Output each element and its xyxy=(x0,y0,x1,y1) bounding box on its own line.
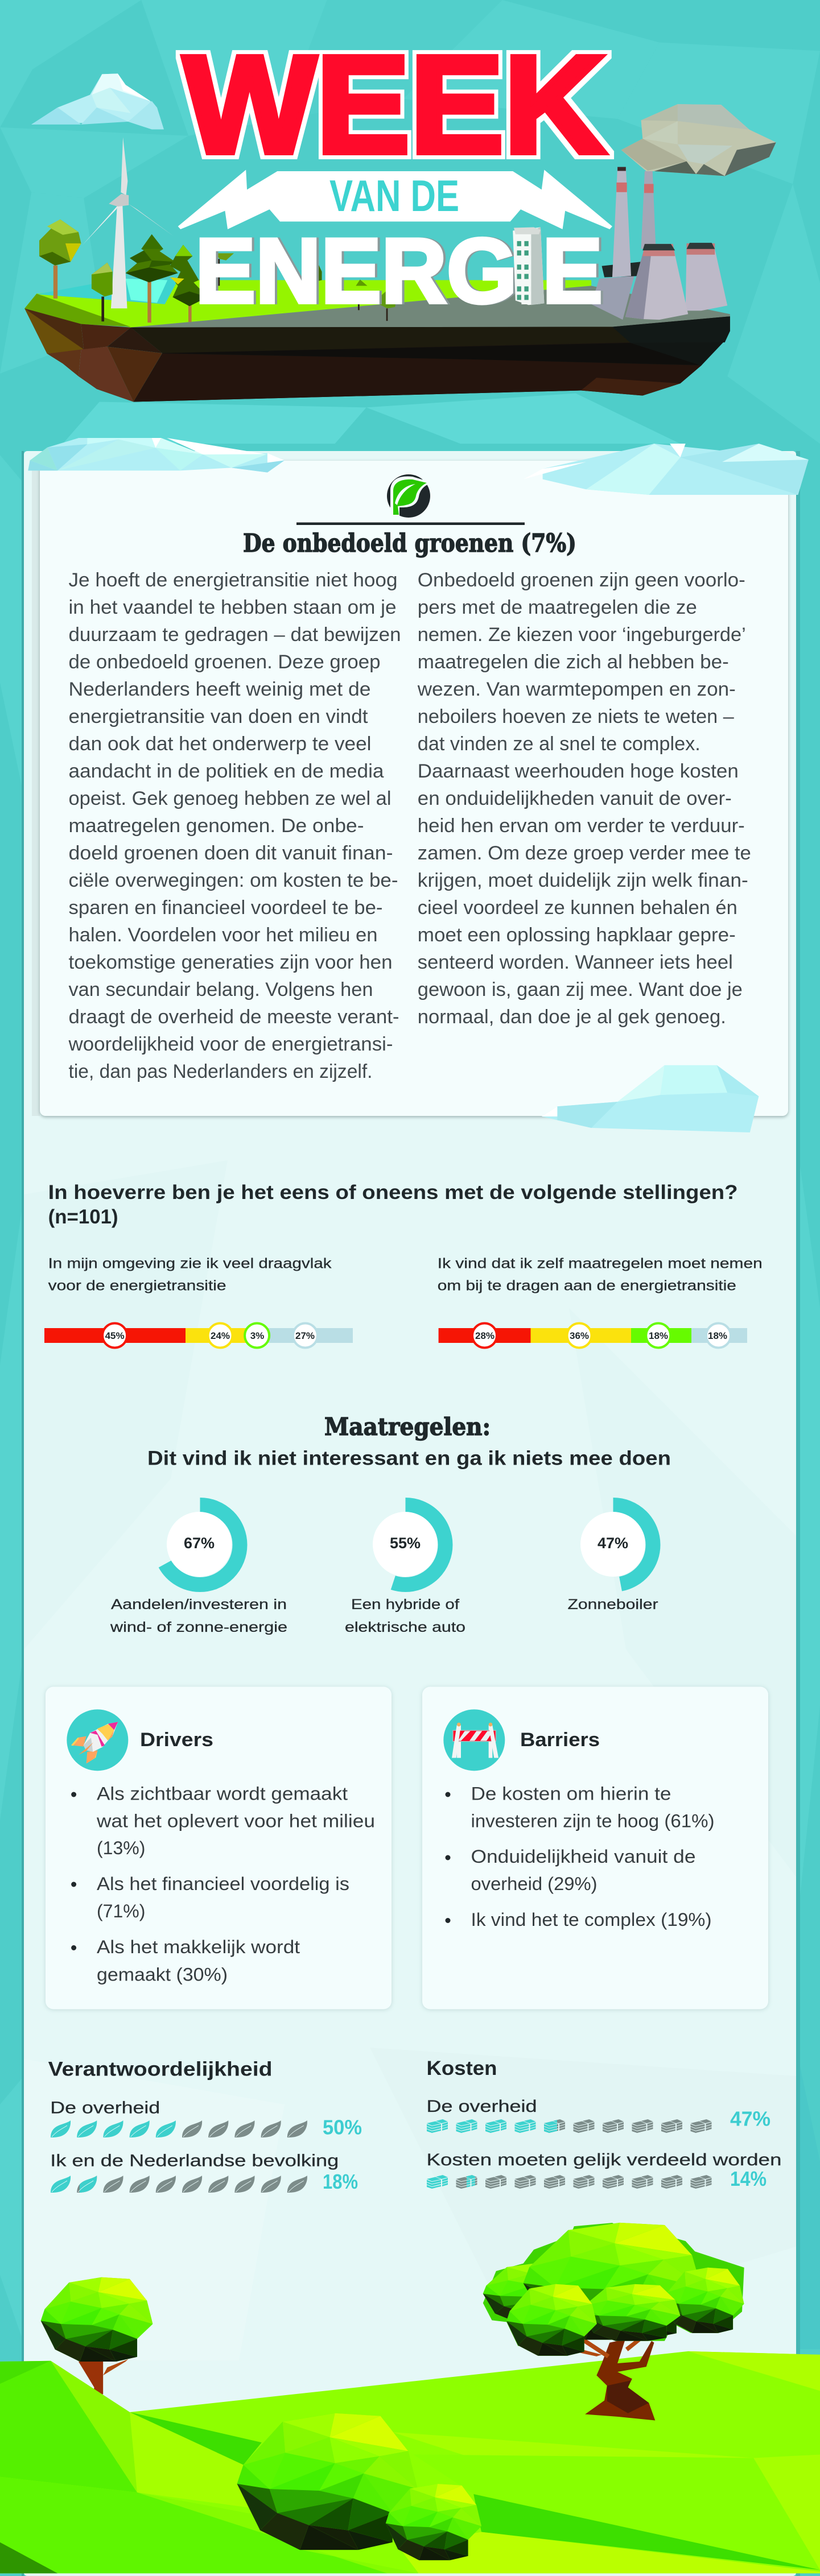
text block: right column: pers met de maatregelen die ze xyxy=(418,597,697,618)
list: drivers: gemaakt (30%) xyxy=(97,1965,228,1985)
list: barriers: overheid (29%) xyxy=(471,1874,598,1894)
text block: right column: dat vinden ze al snel te complex. xyxy=(418,733,700,755)
text block: right column: normaal, dan doe je al gek genoeg. xyxy=(418,1006,726,1028)
list: drivers: (71%) xyxy=(97,1901,145,1921)
big tree xyxy=(483,2223,744,2421)
statement 1 label xyxy=(48,1256,332,1293)
text block: left column: draagt de overheid de meeste verant- xyxy=(68,1006,399,1028)
list: barriers: De kosten om hierin te xyxy=(471,1784,671,1804)
heading: Verantwoordelijkheid: Verantwoordelijkheid xyxy=(48,2058,273,2081)
list: drivers: Als het makkelijk wordt xyxy=(97,1937,300,1957)
icon: road barrier xyxy=(443,1709,505,1771)
text block: left column: opeist. Gek genoeg hebben ze wel al xyxy=(68,788,392,809)
list: drivers: Als het financieel voordelig is xyxy=(97,1874,349,1894)
donut: 47% zonneboiler: Zonneboiler xyxy=(568,1597,658,1612)
donut: 55% hybride of elektrische auto xyxy=(345,1505,465,1635)
bush small xyxy=(386,2484,481,2560)
stacked bar: statement 2 xyxy=(439,1323,747,1348)
iceberg: card top left xyxy=(28,438,285,473)
text block: left column: de onbedoeld groenen. Deze groep xyxy=(68,651,380,673)
title: ENERGIE: ENERGIE xyxy=(195,220,603,322)
text block: left column: toekomstige generaties zijn voor hen xyxy=(68,952,393,973)
donut: 47% zonneboiler xyxy=(568,1505,658,1612)
list: drivers: (13%) xyxy=(97,1838,145,1858)
text block: right column: maatregelen die zich al hebben be- xyxy=(418,651,729,673)
pictogram row: stacks 47% xyxy=(427,2119,711,2133)
heading: Barriers: Barriers xyxy=(520,1729,600,1751)
list: drivers xyxy=(71,1784,375,1985)
panel: Barriers xyxy=(422,1687,768,2009)
text block: right column: krijgen, moet duidelijk zijn welk finan- xyxy=(418,870,748,891)
panel: pale content sheet xyxy=(22,451,800,2576)
section: Kosten xyxy=(427,2057,782,2190)
pictogram row: leaves 50% xyxy=(51,2120,307,2137)
list: barriers xyxy=(445,1784,715,1930)
stacked bar: statement 1: 24% xyxy=(211,1330,230,1341)
text block: left column xyxy=(68,569,401,1082)
text block: left column: in het vaandel te hebben staan om je xyxy=(68,597,396,618)
text block: right column: zamen. Om deze groep verder mee te xyxy=(418,842,751,864)
text block: left column: woordelijkheid voor de energietransi- xyxy=(68,1033,393,1055)
text block: right column: wezen. Van warmtepompen en zon- xyxy=(417,679,736,700)
banner with lightning shape xyxy=(178,169,612,229)
statement 2 label: om bij te dragen aan de energietransitie xyxy=(438,1277,736,1293)
icon: rocket xyxy=(67,1709,128,1771)
stacked bar: statement 2: 28% xyxy=(475,1330,495,1341)
text block: right column: Onbedoeld groenen zijn geen voorlo- xyxy=(418,569,745,591)
donut: 67% wind- of zonne-energie: 67% xyxy=(184,1535,215,1552)
heading: Drivers: Drivers xyxy=(140,1729,213,1751)
list: drivers: wat het oplevert voor het milieu xyxy=(96,1811,375,1831)
stacked bar: statement 1 xyxy=(44,1323,353,1348)
header illustration xyxy=(24,73,776,402)
text block: left column: aandacht in de politiek en de media xyxy=(68,760,384,782)
list: barriers: investeren zijn te hoog (61%) xyxy=(471,1811,715,1831)
power plant xyxy=(591,167,727,320)
iceberg cloud left xyxy=(31,73,164,129)
label: Kosten moeten gelijk verdeeld worden: Kosten moeten gelijk verdeeld worden xyxy=(427,2151,782,2169)
text block: right column: nemen. Ze kiezen voor ‘ingeburgerde’ xyxy=(418,624,746,646)
text block: left column: dan ook dat het onderwerp te veel xyxy=(68,733,371,755)
text block: left column: Je hoeft de energietransitie niet hoog xyxy=(68,569,397,591)
iceberg: card bottom right xyxy=(542,1065,759,1132)
donut: 55% hybride of elektrische auto: elektrische auto xyxy=(345,1619,465,1635)
smog cloud xyxy=(621,104,776,176)
list: barriers: Ik vind het te complex (19%) xyxy=(471,1909,711,1930)
hills xyxy=(0,2351,820,2573)
pictogram row: leaves 18% xyxy=(51,2176,307,2193)
trees on island xyxy=(39,220,396,322)
label: Ik en de Nederlandse bevolking: Ik en de Nederlandse bevolking xyxy=(50,2151,339,2170)
small tree left xyxy=(41,2277,153,2395)
text block: right column: gewoon is, gaan zij mee. Want doe je xyxy=(418,979,743,1000)
text block: left column: maatregelen genomen. De onbe- xyxy=(68,815,364,837)
text block: left column: energietransitie van doen en vindt xyxy=(68,706,368,727)
text block: left column: doeld groenen doen dit vanuit finan- xyxy=(68,842,393,864)
text block: right column: cieel voordeel ze kunnen behalen én xyxy=(418,897,737,919)
donut: 67% wind- of zonne-energie xyxy=(110,1505,287,1635)
text block: left column: ciële overwegingen: om kosten te be- xyxy=(68,870,398,891)
statement 2 label: Ik vind dat ik zelf maatregelen moet nemen xyxy=(438,1256,763,1272)
heading: survey question xyxy=(48,1181,738,1228)
title: VAN DE: VAN DE xyxy=(329,171,459,221)
donut: 47% zonneboiler: 47% xyxy=(598,1535,628,1552)
title: WEEK: WEEK xyxy=(183,27,605,182)
text block: right column: en onduidelijkheden vanuit de over- xyxy=(418,788,732,809)
donut: 55% hybride of elektrische auto: 55% xyxy=(390,1535,421,1552)
text block: right column: Daarnaast weerhouden hoge kosten xyxy=(418,760,739,782)
stacked bar: statement 1: 45% xyxy=(105,1330,125,1341)
icon: green leaf xyxy=(387,474,433,518)
statement 1 label: In mijn omgeving zie ik veel draagvlak xyxy=(48,1256,332,1272)
text block: right column: moet een oplossing hapklaar gepre- xyxy=(418,924,736,946)
text block: right column: heid hen ervan om verder te verduur- xyxy=(418,815,745,837)
value: 14%: 14% xyxy=(730,2167,767,2190)
text block: left column: tie, dan pas Nederlanders en zijzelf. xyxy=(68,1061,372,1082)
list: barriers: Onduidelijkheid vanuit de xyxy=(471,1846,695,1867)
donut: 67% wind- of zonne-energie: Aandelen/investeren in xyxy=(111,1597,287,1612)
text block: left column: Nederlanders heeft weinig met de xyxy=(68,679,371,700)
text block: right column: neboilers hoeven ze niets te weten – xyxy=(418,706,734,727)
stacked bar: statement 2: 18% xyxy=(708,1330,727,1341)
value: 18%: 18% xyxy=(323,2170,358,2193)
list: drivers: Als zichtbaar wordt gemaakt xyxy=(97,1784,348,1804)
panel: Drivers xyxy=(46,1687,392,2009)
stacked bar: statement 2: 18% xyxy=(649,1330,668,1341)
heading: Maatregelen: Maatregelen: xyxy=(324,1413,491,1441)
text block: right column xyxy=(417,569,751,1028)
subheading: Dit vind ik niet interessant: Dit vind ik niet interessant en ga ik niets mee doen xyxy=(147,1447,671,1470)
text block: left column: halen. Voordelen voor het milieu en xyxy=(68,924,378,946)
text block: right column: senteerd worden. Wanneer iets heel xyxy=(418,952,733,973)
heading: survey question: In hoeverre ben je het eens of oneens met de volgende stellingen? xyxy=(48,1181,738,1204)
iceberg: card top right xyxy=(524,444,809,495)
text block: left column: duurzaam te gedragen – dat bewijzen xyxy=(68,624,401,646)
text block: left column: van secundair belang. Volgens hen xyxy=(68,979,373,1000)
statement 1 label: voor de energietransitie xyxy=(48,1277,226,1293)
landscape illustration xyxy=(0,2223,820,2573)
panel: intro card xyxy=(28,438,809,1132)
icon: skyscraper in ENERGIE xyxy=(513,227,544,305)
stacked bar: statement 1: 3% xyxy=(250,1330,264,1341)
label: De overheid: De overheid xyxy=(50,2099,160,2117)
donut: 55% hybride of elektrische auto: Een hybride of xyxy=(351,1597,459,1612)
statement 2 label xyxy=(438,1256,763,1293)
stacked bar: statement 1: 27% xyxy=(295,1330,315,1341)
floating island xyxy=(24,279,730,402)
pictogram row: stacks 14% xyxy=(427,2175,711,2189)
section: Verantwoordelijkheid xyxy=(48,2058,362,2193)
bush large xyxy=(237,2413,418,2550)
stacked bar: statement 2: 36% xyxy=(570,1330,589,1341)
heading: survey question: (n=101) xyxy=(48,1206,118,1228)
value: 47%: 47% xyxy=(730,2107,770,2131)
label: De overheid (kosten): De overheid xyxy=(427,2097,537,2116)
wind turbine xyxy=(83,137,174,308)
heading: De onbedoeld groenen: De onbedoeld groenen (7%) xyxy=(243,529,576,558)
heading: Kosten: Kosten xyxy=(427,2057,497,2079)
text block: left column: sparen en financieel voordeel te be- xyxy=(68,897,382,919)
value: 50%: 50% xyxy=(323,2116,362,2139)
donut: 67% wind- of zonne-energie: wind- of zonne-energie xyxy=(110,1619,287,1635)
